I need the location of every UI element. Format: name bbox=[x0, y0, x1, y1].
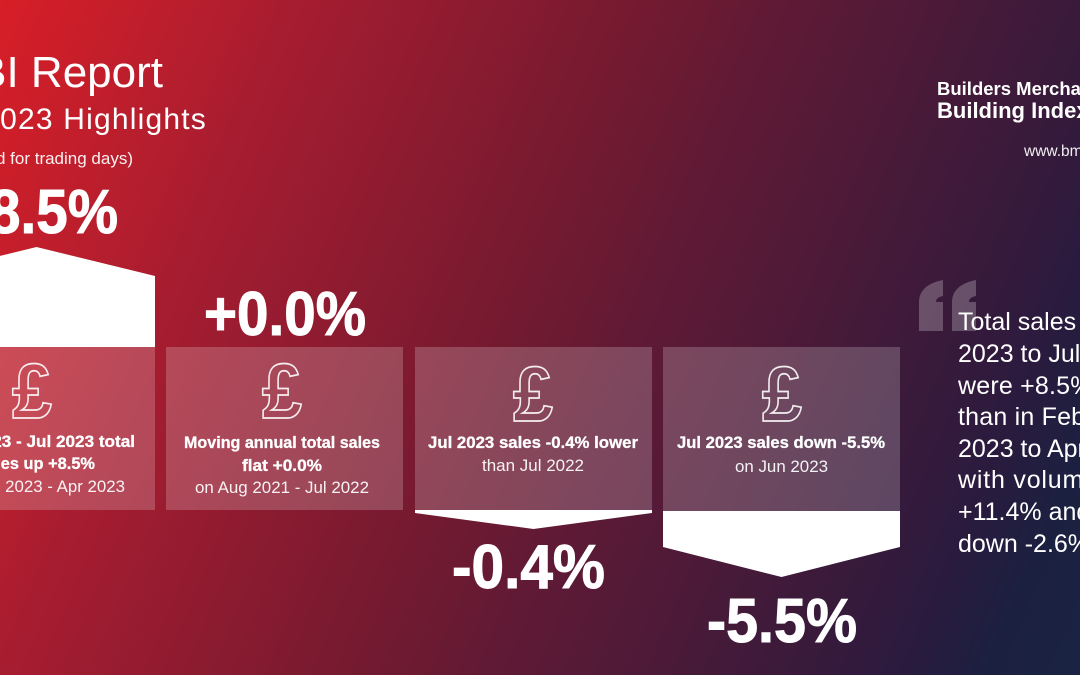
card text bbox=[677, 433, 885, 476]
card text: Jul 2023 sales down -5.5% bbox=[677, 433, 885, 452]
card bbox=[415, 347, 652, 510]
value: -5.5% bbox=[707, 587, 857, 656]
card text: on Aug 2021 - Jul 2022 bbox=[195, 479, 369, 497]
icon: pound: £ bbox=[513, 350, 553, 438]
panel: month-on-month sales bbox=[663, 347, 900, 656]
logo: Builders Merchants Building Index bbox=[937, 78, 1080, 160]
icon: pound: £ bbox=[262, 347, 302, 435]
card text: than Jul 2022 bbox=[482, 457, 584, 475]
card text bbox=[428, 433, 638, 475]
value: +0.0% bbox=[204, 280, 366, 349]
panel: moving annual total sales bbox=[166, 280, 403, 510]
quote panel bbox=[919, 280, 1080, 558]
card text: on Jun 2023 bbox=[735, 458, 828, 476]
down arrow bbox=[663, 511, 900, 577]
quote text bbox=[957, 308, 1080, 558]
panel: quarter-on-quarter total sales bbox=[0, 178, 155, 510]
down arrow bbox=[415, 510, 652, 529]
card bbox=[663, 347, 900, 511]
icon: pound: £ bbox=[762, 350, 802, 438]
card text bbox=[184, 433, 380, 497]
card text: flat +0.0% bbox=[242, 456, 322, 475]
panel: year-on-year sales bbox=[415, 347, 652, 602]
up arrow bbox=[0, 247, 155, 347]
card text bbox=[0, 432, 135, 496]
icon: quotation marks bbox=[919, 280, 976, 331]
value: -0.4% bbox=[452, 533, 605, 602]
header: report title bbox=[0, 48, 207, 168]
icon: pound: £ bbox=[12, 347, 52, 435]
card bbox=[0, 347, 155, 510]
card text: Jul 2023 sales -0.4% lower bbox=[428, 433, 638, 452]
card text: Moving annual total sales bbox=[184, 433, 380, 452]
card bbox=[166, 347, 403, 510]
